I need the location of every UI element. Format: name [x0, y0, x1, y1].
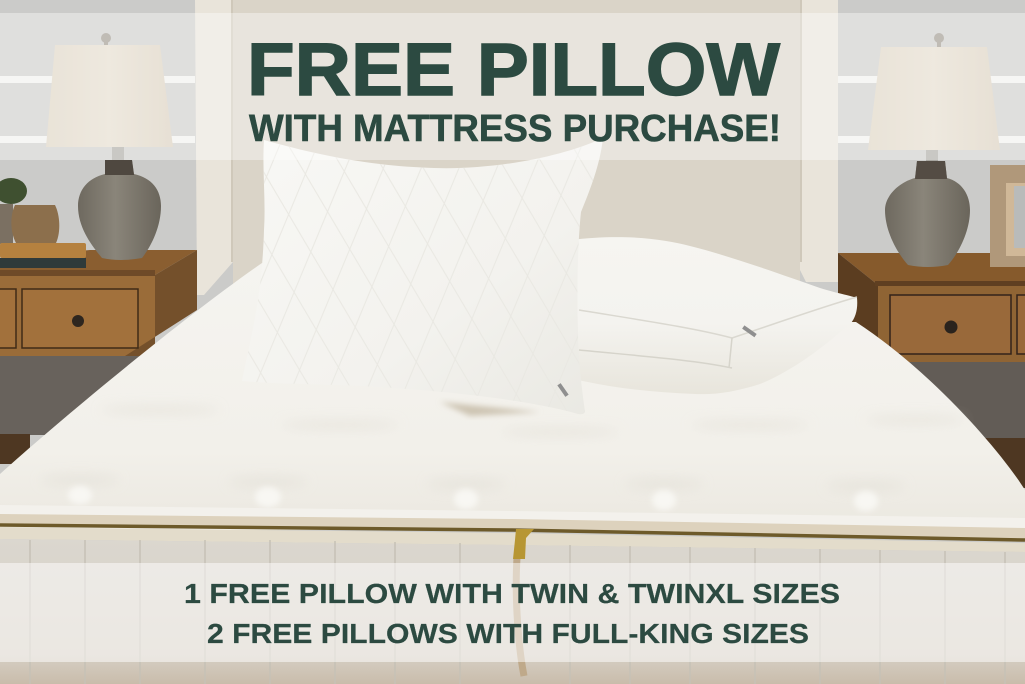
bottom translucent banner	[0, 563, 1025, 662]
right picture frame	[990, 165, 1025, 267]
left nightstand	[0, 250, 197, 356]
mattress tuft buttons	[68, 486, 878, 511]
subheadline: WITH MATTRESS PURCHASE!	[249, 108, 781, 150]
left nightstand decor: plant, jar and books	[0, 178, 86, 268]
offer line: twin sizes: 1 FREE PILLOW WITH TWIN & TWINXL SIZES	[184, 578, 840, 609]
mattress side panel	[0, 539, 1025, 684]
shadow below nightstands and floor	[0, 355, 1025, 488]
left lamp	[46, 33, 173, 260]
front pillow	[242, 138, 603, 414]
mattress tufting	[40, 406, 965, 491]
mattress zipper and piping	[0, 505, 1025, 552]
right lamp	[868, 33, 1000, 267]
headboard	[195, 0, 838, 320]
right nightstand	[838, 253, 1025, 362]
shadow under pillows	[440, 402, 540, 416]
offer line: full to king sizes: 2 FREE PILLOWS WITH FULL-KING SIZES	[207, 618, 809, 649]
wall panel moulding	[0, 76, 1025, 143]
mattress top	[0, 263, 1025, 530]
zipper pull	[513, 529, 534, 676]
back pillow	[570, 237, 857, 394]
headline: FREE PILLOW	[247, 28, 780, 111]
top translucent banner	[0, 13, 1025, 160]
